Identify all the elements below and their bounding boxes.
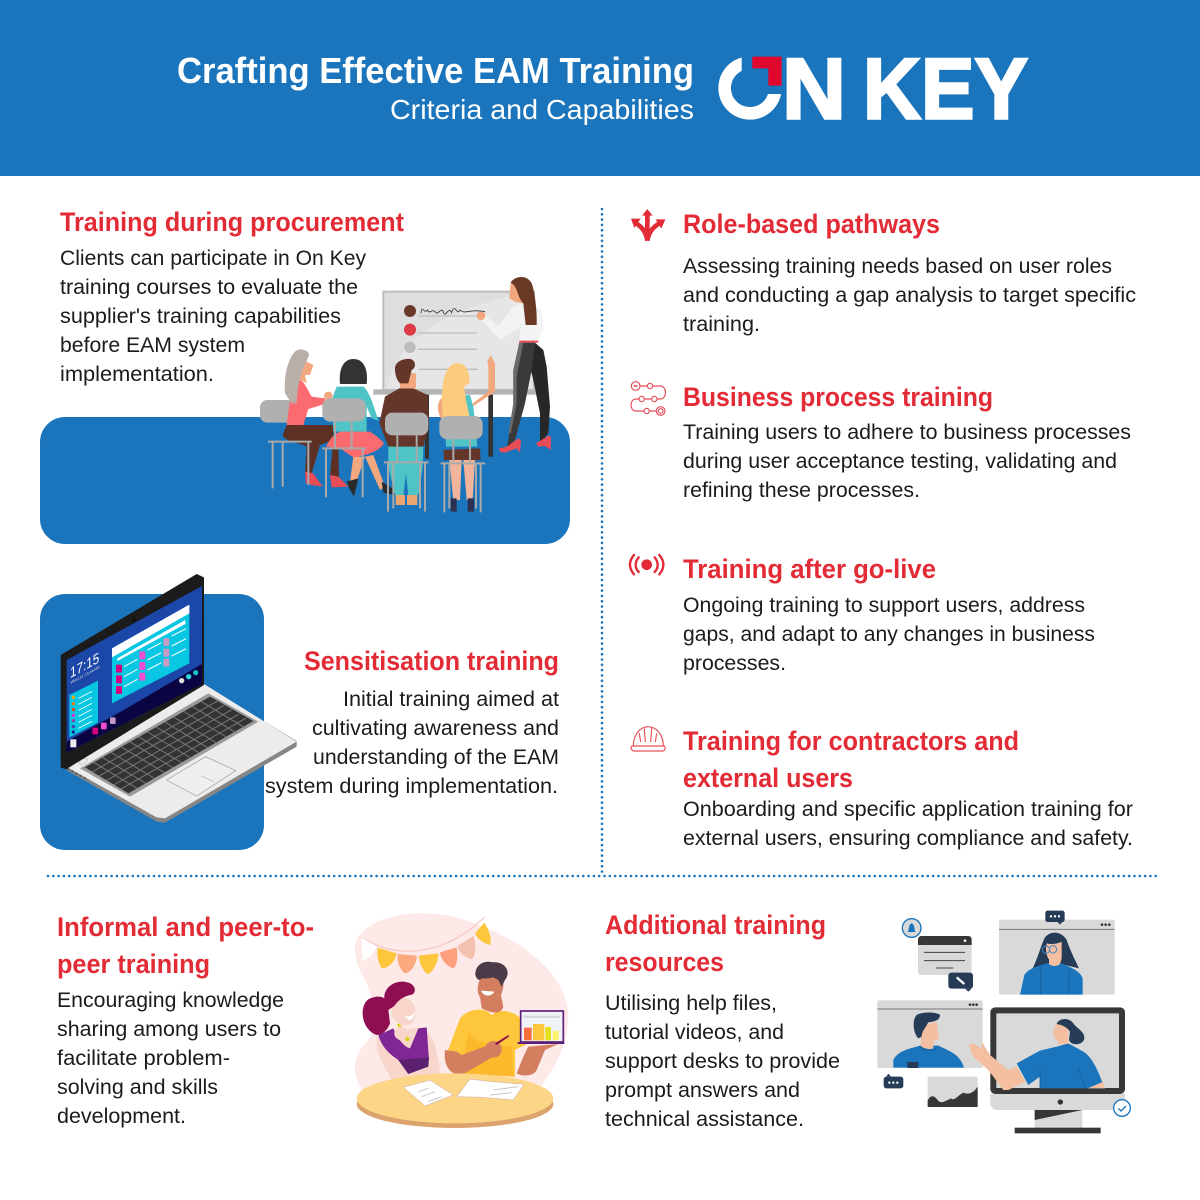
body text: Training users to adhere to business processes <box>683 420 1131 444</box>
bell <box>902 919 921 937</box>
heading: Training during procurement <box>60 207 404 237</box>
teacher <box>477 277 551 453</box>
body text: prompt answers and <box>605 1078 800 1102</box>
body text: support desks to provide <box>605 1049 840 1073</box>
panel: training after go-live <box>630 554 1095 675</box>
illustration: two people studying <box>355 913 568 1128</box>
heading <box>57 912 314 979</box>
body text: before EAM system <box>60 333 245 357</box>
icon: hard hat <box>631 727 665 751</box>
body text: Initial training aimed at <box>343 687 559 711</box>
body text: Onboarding and specific application training for <box>683 797 1133 821</box>
blue panel <box>40 417 570 544</box>
body text: Utilising help files, <box>605 991 777 1015</box>
body text <box>683 593 1095 675</box>
blue panel <box>40 594 264 850</box>
speech bubble and chart <box>884 1077 903 1088</box>
icon: diverging arrows <box>631 209 665 241</box>
body text <box>60 246 366 386</box>
heading: resources <box>605 947 724 977</box>
body text <box>683 254 1136 336</box>
woman window <box>999 920 1115 995</box>
student brown hair <box>388 445 423 495</box>
body text: refining these processes. <box>683 478 920 502</box>
body text: processes. <box>683 651 786 675</box>
heading: Informal and peer-to- <box>57 912 314 942</box>
logo <box>718 42 1028 138</box>
man <box>445 1010 528 1077</box>
heading: external users <box>683 763 853 793</box>
body text: implementation. <box>60 362 214 386</box>
body text: gaps, and adapt to any changes in business <box>683 622 1095 646</box>
heading <box>683 726 1019 793</box>
body text: supplier's training capabilities <box>60 304 341 328</box>
body text: and conducting a gap analysis to target specific <box>683 283 1136 307</box>
body text <box>265 687 559 798</box>
title: Crafting Effective EAM Training <box>177 50 694 91</box>
heading <box>605 910 826 977</box>
body text <box>605 991 840 1131</box>
body text <box>683 420 1131 502</box>
header band <box>0 0 1200 176</box>
body text: cultivating awareness and <box>312 716 559 740</box>
dialog window <box>918 936 972 975</box>
body text: system during implementation. <box>265 774 558 798</box>
body text: Assessing training needs based on user roles <box>683 254 1112 278</box>
logo: KEY <box>863 42 1028 138</box>
laptop chart <box>521 1011 563 1042</box>
clock text: 17:15 <box>70 650 100 682</box>
body text: technical assistance. <box>605 1107 804 1131</box>
illustration: classroom <box>260 277 551 512</box>
panel: additional training resources <box>605 910 1130 1133</box>
illustration: video call <box>877 911 1130 1133</box>
subtitle: Criteria and Capabilities <box>390 94 694 125</box>
icon: process path <box>631 382 665 415</box>
heading: Training for contractors and <box>683 726 1019 756</box>
body text: sharing among users to <box>57 1017 281 1041</box>
body text: understanding of the EAM <box>313 745 559 769</box>
panel: role-based pathways <box>631 209 1136 336</box>
student gray hair <box>260 400 295 423</box>
illustration: laptop: Wed,11 /June/49 <box>71 664 100 685</box>
illustration: laptop <box>61 574 297 823</box>
table <box>357 1080 553 1128</box>
man window <box>877 1000 983 1068</box>
panel: training during procurement <box>40 207 570 544</box>
heading: peer training <box>57 949 210 979</box>
presenter <box>1017 1043 1104 1088</box>
student black hair <box>365 455 385 490</box>
body text: development. <box>57 1104 186 1128</box>
body text: training courses to evaluate the <box>60 275 358 299</box>
icon: live signal <box>630 555 663 574</box>
body text: Clients can participate in On Key <box>60 246 366 270</box>
body text: Ongoing training to support users, address <box>683 593 1085 617</box>
panel: informal and peer-to-peer training <box>57 912 568 1128</box>
panel: business process training <box>631 382 1131 502</box>
divider horizontal <box>48 875 1156 877</box>
woman <box>377 1027 440 1085</box>
body text: facilitate problem- <box>57 1046 230 1070</box>
heading: Training after go-live <box>683 554 936 584</box>
body text: training. <box>683 312 760 336</box>
panel: training for contractors <box>631 726 1133 850</box>
body text: during user acceptance testing, validating and <box>683 449 1117 473</box>
student blond hair <box>449 460 475 500</box>
logo: N <box>782 42 846 138</box>
heading: Business process training <box>683 382 993 412</box>
heading: Additional training <box>605 910 826 940</box>
body text <box>57 988 284 1128</box>
body text: Encouraging knowledge <box>57 988 284 1012</box>
monitor <box>1035 1107 1082 1128</box>
heading: Sensitisation training <box>304 646 559 676</box>
body text: tutorial videos, and <box>605 1020 784 1044</box>
body text: solving and skills <box>57 1075 218 1099</box>
body text <box>683 797 1133 850</box>
divider vertical <box>601 209 603 875</box>
heading: Role-based pathways <box>683 209 940 239</box>
panel: sensitisation training <box>40 574 559 850</box>
body text: external users, ensuring compliance and safety. <box>683 826 1133 850</box>
